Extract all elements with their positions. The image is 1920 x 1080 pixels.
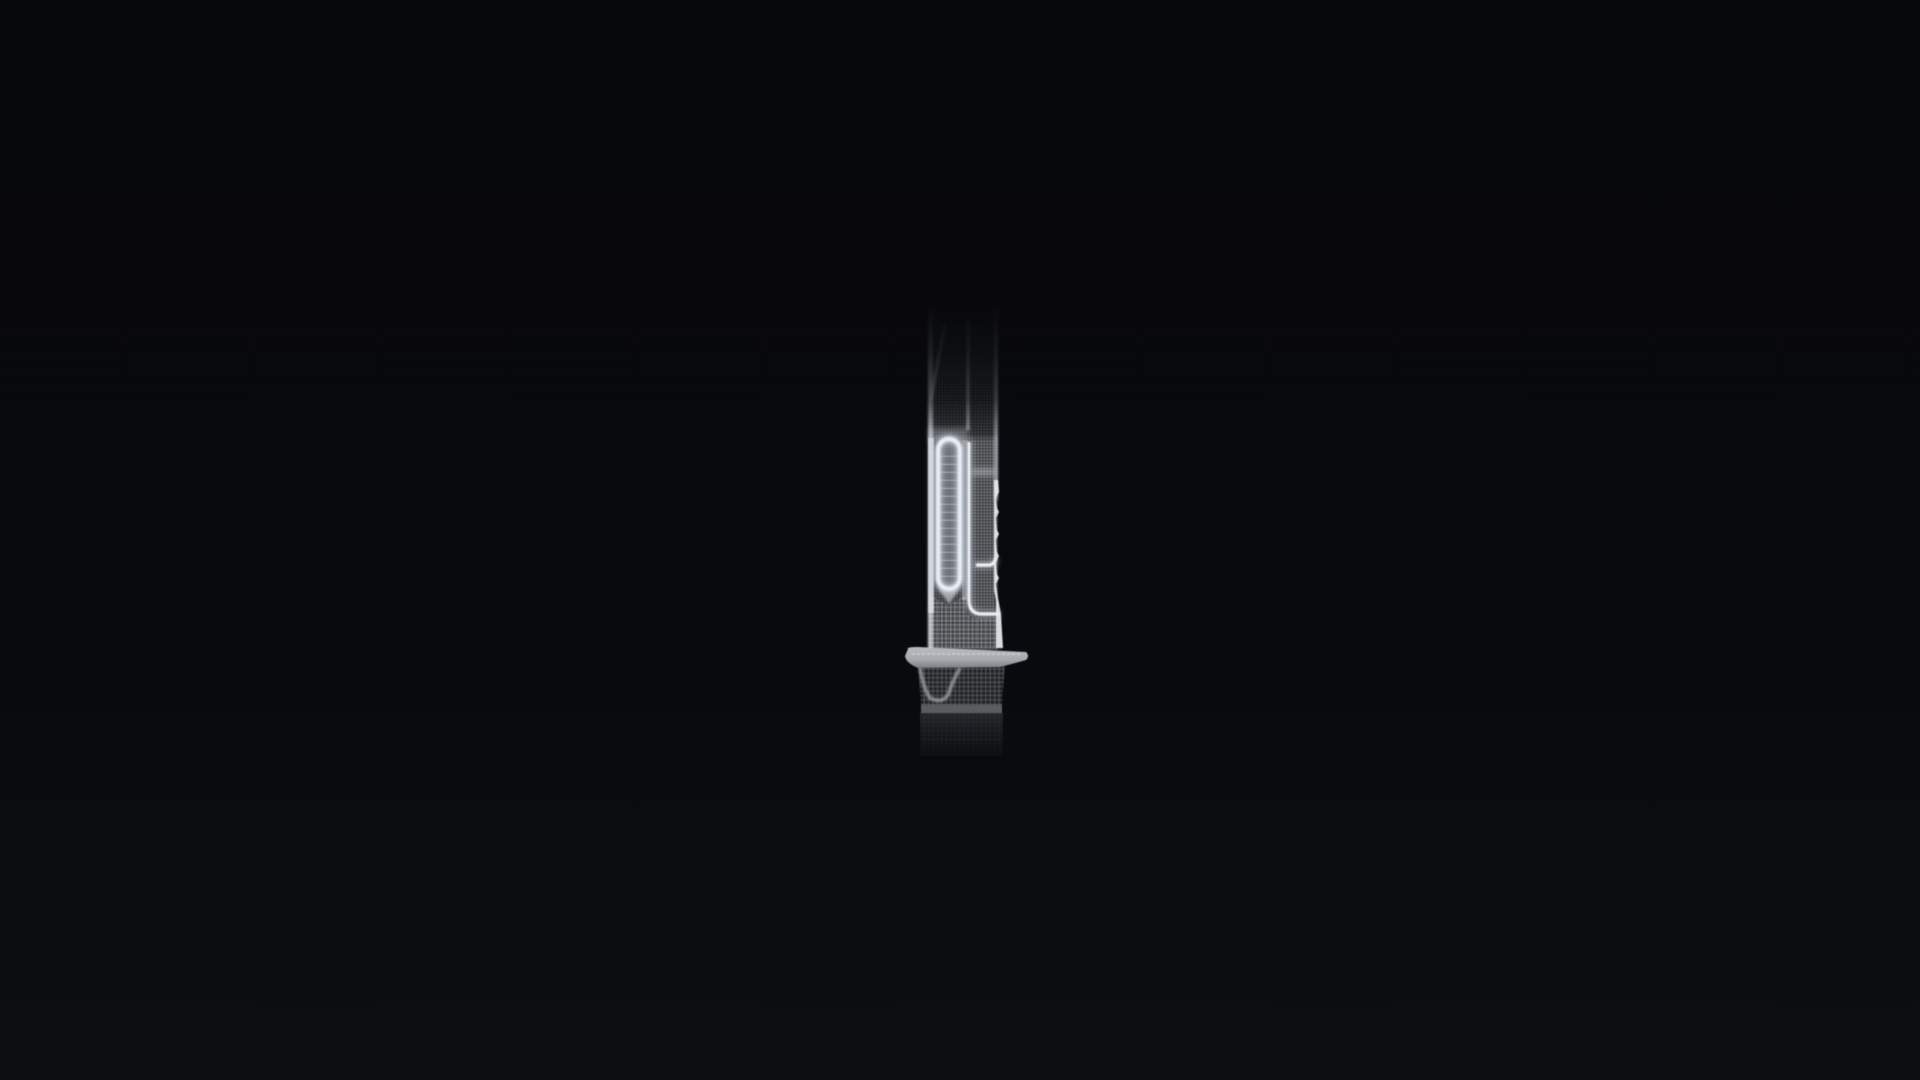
blade upper body: [928, 300, 998, 650]
lower fade: [920, 713, 1003, 768]
V notch under loop: [936, 585, 962, 604]
flange disc: [905, 647, 1028, 668]
right channel fade above: [968, 380, 970, 442]
dense mesh lower body: [929, 595, 998, 648]
lower blade fill: [928, 436, 1002, 650]
left-of-channel strip: [962, 440, 968, 600]
inner loop rungs: [940, 452, 958, 580]
neck mesh: [917, 662, 1006, 705]
dense mesh right side: [972, 440, 994, 610]
flange: [905, 647, 1028, 705]
neck curved highlight: [920, 668, 960, 700]
neck band: [921, 705, 1002, 713]
streak lines at top: [931, 320, 968, 430]
inner loop fill: [938, 439, 960, 589]
inner loop line: [938, 439, 960, 589]
blade right edge: [994, 300, 998, 500]
inner loop glow: [938, 439, 960, 589]
neck grid: [918, 665, 1005, 705]
upper haze band above loop: [929, 428, 969, 442]
lower fade ticks: [922, 713, 1001, 748]
serrated right edge: [994, 480, 1003, 648]
background: [904, 324, 1029, 748]
wireframe blade object: [905, 300, 1028, 768]
flange speckle: [912, 653, 1022, 655]
right channel line glow: [969, 440, 1000, 614]
blade mesh: [932, 381, 998, 650]
blade glowing left edge: [928, 300, 933, 650]
left edge bright strip: [928, 438, 934, 613]
right channel line: [969, 442, 1000, 614]
blade translucent fill: [928, 386, 998, 650]
